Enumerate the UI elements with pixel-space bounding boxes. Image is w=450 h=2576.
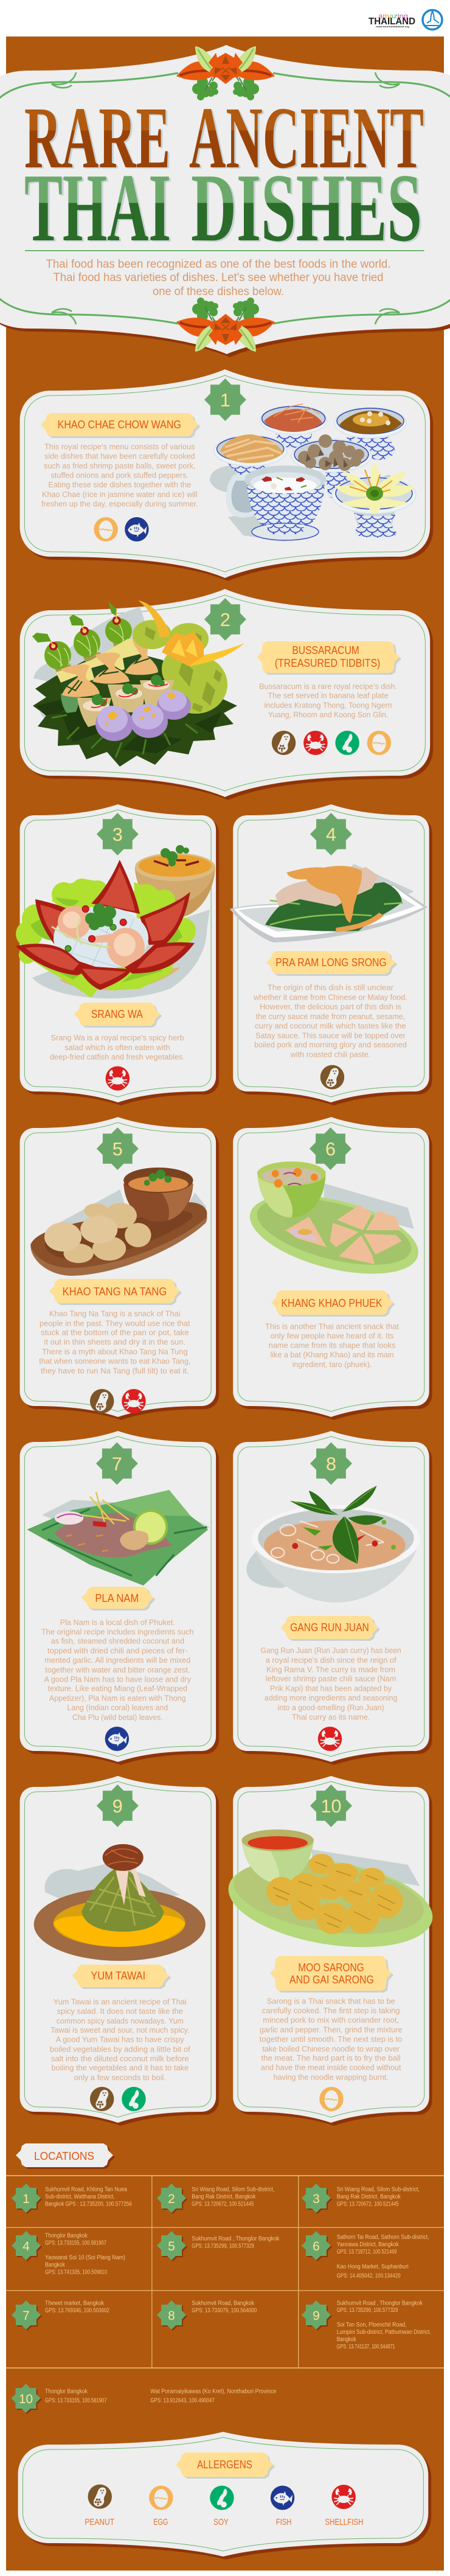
illustration: banana leaf plate with treasured tidbits — [32, 600, 244, 767]
location text 4: Bangkok — [45, 2262, 66, 2268]
description: leftover shrimp paste chili sauce (Nam — [266, 1674, 396, 1683]
description: freshen up the day, especially during summer. — [41, 500, 198, 509]
location text 4: GPS: 13.741335, 100.509810 — [45, 2269, 107, 2275]
intro text: Thai food has been recognized as one of the best foods in the world. — [46, 258, 390, 271]
location badge 4 — [12, 2231, 42, 2261]
location 1 — [12, 2184, 132, 2214]
description: Yum Tawai is an ancient recipe of Thai — [54, 1997, 187, 2007]
illustration: sarong balls with chili sauce — [222, 1829, 439, 1960]
title label — [72, 1965, 169, 1987]
description: The original recipe includes ingredients such — [41, 1627, 194, 1636]
location badge 6 — [302, 2231, 332, 2261]
location text 9: GPS: 13.741137, 100.544871 — [337, 2344, 395, 2350]
description: carefully cooked. The first step is taking — [262, 2007, 400, 2015]
location text 4: GPS: 13.733155, 100.581907 — [45, 2240, 106, 2246]
location text 9: GPS: 13.735299, 100.577329 — [337, 2307, 398, 2314]
title label: KHANG KHAO PHUEK — [281, 1297, 382, 1309]
location badge 3 — [302, 2184, 332, 2214]
illustration: Run Juan curry bowl with basil — [246, 1486, 420, 1603]
location 4 — [12, 2231, 125, 2275]
description: includes Kratong Thong, Toong Ngern — [264, 701, 392, 710]
title label — [270, 1956, 392, 1991]
allergen icon — [319, 2087, 344, 2111]
description: Appetizer), Pla Nam is eaten with Thong — [49, 1694, 186, 1703]
location badge 5 — [157, 2231, 187, 2261]
logo url: www.tourismthailand.org — [375, 25, 410, 28]
panel: dish 8 Gang Run Juan — [233, 1431, 429, 1762]
panel: dish 3 Srang Wa — [16, 804, 216, 1102]
description: Srang Wa is a royal recipe's spicy herb — [51, 1034, 184, 1042]
illustration: pork on morning glory with peanut sauce — [230, 864, 428, 942]
allergen icons — [272, 731, 391, 755]
description: The origin of this dish is still unclear — [268, 983, 393, 992]
description: stuffed onions and pork stuffed peppers. — [50, 471, 189, 480]
allergen: egg: EGG — [153, 2518, 168, 2527]
description: into a good-smelling (Run Juan) — [278, 1704, 384, 1712]
title line 1: RARE — [24, 89, 170, 187]
number badge: 2 — [220, 609, 230, 630]
description: take boiled Chinese noodle to wrap over — [262, 2045, 400, 2053]
location text 9 — [337, 2300, 431, 2350]
location badge 1: 1 — [22, 2192, 30, 2206]
description: This is another Thai ancient snack that — [265, 1322, 400, 1331]
panel: dish 7 Pla Nam — [20, 1431, 216, 1762]
illustration: pla nam on banana leaf — [27, 1490, 210, 1586]
number badge: 4 — [326, 824, 336, 845]
description: salt into the diluted coconut milk before — [51, 2055, 189, 2063]
allergen: egg — [149, 2486, 173, 2527]
location text 6: Kao Hong Market, Suphanburi — [337, 2263, 409, 2271]
description: they have to run Na Tang (full tilt) to eat it. — [41, 1366, 189, 1376]
location text 5: Sukhumvit Road , Thonglor Bangkok — [192, 2235, 280, 2243]
card inner line — [24, 810, 211, 1097]
allergen icon — [318, 1727, 342, 1751]
logo word: Thailand: THAILAND — [369, 16, 415, 27]
location text 1: Sukhumvit Road, Khlong Tan Nuea — [45, 2187, 127, 2193]
description: boiling the vegetables and it has to take — [51, 2064, 189, 2072]
title label: KHAO TANG NA TANG — [63, 1285, 167, 1298]
location badge 9: 9 — [313, 2309, 320, 2323]
description: the meat. The hard part is to fry the ball — [261, 2054, 401, 2063]
location text 1: Sub-district, Watthana District, — [45, 2194, 115, 2200]
title label: PRA RAM LONG SRONG — [275, 956, 387, 969]
number badge — [310, 813, 352, 855]
location text 2: Bang Rak District, Bangkok — [192, 2194, 256, 2200]
description: side dishes that have been carefully cooked — [44, 452, 195, 461]
location text 6: Yannawa District, Bangkok — [337, 2241, 400, 2248]
allergen: soy — [210, 2486, 234, 2527]
description: together until smooth. The next step is to — [260, 2035, 403, 2044]
bottom flower ornament — [176, 298, 275, 352]
title label: PLA NAM — [95, 1592, 139, 1604]
card inner line — [24, 595, 425, 791]
location badge 2 — [157, 2184, 187, 2214]
title label — [281, 1616, 378, 1639]
description: minced pork to mix with coriander root, — [263, 2016, 399, 2025]
location text 10: Thonglor Bangkok — [45, 2389, 88, 2395]
location text 10: Wat Poramaiyikawas (Ko Kret), Nonthaburi Province — [150, 2389, 277, 2395]
panel: allergens — [18, 2432, 428, 2557]
location text 8 — [192, 2300, 257, 2314]
location text 10: GPS: 13.733155, 100.581907 — [45, 2397, 107, 2404]
location badge 3: 3 — [313, 2192, 320, 2206]
description: Lang (Indian coral) leaves and — [67, 1704, 168, 1712]
card inner line — [238, 1781, 424, 2117]
description: Cha Plu (wild betal) leaves. — [72, 1713, 163, 1722]
description: ingredient, taro (phuek). — [292, 1360, 372, 1369]
location badge 10: 10 — [19, 2392, 33, 2406]
location text 3: Bang Rak District, Bangkok — [337, 2194, 401, 2200]
description: Khao Chae (rice in jasmine water and ice) will — [42, 490, 198, 499]
description: Khao Tang Na Tang is a snack of Thai — [49, 1309, 181, 1318]
location text 8: GPS: 13.733079, 100.564000 — [192, 2307, 257, 2314]
title label: (TREASURED TIDBITS) — [275, 656, 380, 669]
description: the curry sauce made from peanut, sesame, — [256, 1012, 405, 1021]
location badge 7: 7 — [22, 2309, 30, 2323]
description: The set served in banana leaf plate — [268, 691, 389, 700]
title label: KHAO CHAE CHOW WANG — [58, 418, 181, 431]
location text 7 — [45, 2300, 109, 2314]
location text 9: Soi Ton Son, Ploenchit Road, — [337, 2322, 407, 2328]
location badge 6: 6 — [313, 2240, 320, 2254]
description — [41, 1618, 194, 1722]
location badge 2: 2 — [168, 2192, 175, 2206]
description: mented garlic. All ingredients will be mixed — [44, 1656, 191, 1665]
description: that when someone wants to eat Khao Tang, — [39, 1357, 190, 1366]
number badge — [204, 378, 246, 421]
location text 9: Lumpini Sub-district, Pathumwan District, — [337, 2329, 431, 2336]
banner shape — [0, 45, 450, 354]
location 5 — [157, 2231, 280, 2261]
card inner line — [24, 1781, 211, 2117]
title label — [176, 2452, 273, 2477]
illustration: crispy rice crackers with dip — [30, 1168, 207, 1276]
title label: SRANG WA — [91, 1008, 143, 1020]
description: name came from its shape that looks — [269, 1341, 395, 1350]
allergen: peanut: PEANUT — [85, 2518, 114, 2527]
description: This royal recipe's menu consists of various — [44, 442, 195, 451]
title label — [41, 413, 198, 436]
allergen: fish — [271, 2486, 294, 2527]
description: Satay sauce. This sauce will be topped over — [255, 1031, 406, 1040]
description: boiled pork and morning glory and seasoned — [254, 1040, 407, 1050]
location badge 8 — [157, 2300, 187, 2331]
description: spicy salad. It does not taste like the — [57, 2007, 183, 2016]
location 7 — [12, 2300, 109, 2331]
number badge: 7 — [112, 1453, 122, 1475]
description: A good Yum Tawai has to have crispy — [56, 2035, 185, 2044]
panel: dish 5 Khao Tang Na Tang — [20, 1117, 216, 1417]
illustration: royal side dishes in porcelain bowls — [210, 404, 416, 541]
allergen icon — [106, 1066, 130, 1090]
number badge — [204, 598, 246, 641]
location text 3: Sri Wiang Road, Silom Sub-district, — [337, 2187, 420, 2193]
location text 1: Bangkok GPS : 13.735200, 100.577256 — [45, 2201, 132, 2207]
title label — [49, 1279, 180, 1303]
location text 4 — [45, 2233, 125, 2275]
description: texture. Like eating Miang (Leaf-Wrapped — [48, 1684, 187, 1693]
heading: locations: LOCATIONS — [34, 2150, 94, 2162]
description — [260, 1997, 403, 2082]
location text 9: Sukhumvit Road , Thonglor Bangkok — [337, 2300, 423, 2307]
card shape — [20, 369, 430, 578]
description: King Rama V. The curry is made from — [266, 1665, 395, 1674]
title line 1 — [24, 89, 424, 187]
location text 9: Bangkok — [337, 2336, 357, 2343]
description: only few people have heard of it. Its — [270, 1332, 394, 1340]
title label — [266, 951, 395, 974]
description — [50, 1034, 185, 1062]
description: Bussaracum is a rare royal recipe's dish. — [259, 682, 397, 691]
allergen: fish: FISH — [276, 2518, 291, 2527]
description: with roasted chili paste. — [290, 1050, 370, 1059]
locations grid lines — [6, 2175, 444, 2369]
title line 2 — [24, 153, 422, 262]
description: common spicy salads nowadays. Yum — [57, 2017, 184, 2025]
location 3 — [302, 2184, 420, 2214]
description — [41, 442, 198, 509]
title label — [81, 1587, 154, 1609]
location text 5 — [192, 2235, 280, 2250]
location badge 8: 8 — [168, 2309, 175, 2323]
location text 3 — [337, 2187, 420, 2207]
allergen icons — [94, 517, 149, 541]
number badge — [97, 1784, 139, 1827]
description: There is a myth about Khao Tang Na Tung — [42, 1348, 188, 1356]
card shape — [233, 1776, 429, 2123]
description: as fish, steamed shredded coconut and — [51, 1637, 184, 1646]
number badge — [96, 1442, 138, 1485]
description: A good Pla Nam has to have loose and dry — [44, 1675, 192, 1684]
description: it out in thin sheets and dry it in the sun. — [44, 1338, 185, 1346]
description: Sarong is a Thai snack that has to be — [267, 1997, 395, 2006]
location text 2: Sri Wiang Road, Silom Sub-district, — [192, 2187, 274, 2193]
card inner line — [238, 1436, 424, 1756]
description: Gang Run Juan (Run Juan curry) has been — [261, 1646, 401, 1655]
card inner line — [238, 810, 424, 1097]
description — [50, 1997, 190, 2082]
vines — [0, 72, 450, 324]
description — [253, 983, 407, 1059]
panel: dish 1 Khao Chae Chow Wang — [20, 369, 430, 578]
number badge: 3 — [112, 824, 123, 845]
number badge — [310, 1127, 351, 1170]
number badge — [310, 1784, 352, 1827]
description: such as fried shrimp paste balls, sweet pork, — [44, 462, 196, 470]
location text 7: Thewet market, Bangkok — [45, 2300, 105, 2307]
location text 4: Yaowarat Soi 10 (Soi Plang Nam) — [45, 2255, 125, 2261]
card shape — [233, 804, 429, 1102]
description: only a few seconds to boil. — [74, 2073, 166, 2082]
card inner line — [238, 1123, 424, 1412]
intro text — [46, 258, 390, 298]
card shape — [20, 1117, 216, 1417]
title line 2: THAI — [24, 153, 171, 262]
description — [265, 1322, 400, 1369]
location text 2 — [192, 2187, 274, 2207]
number badge — [310, 1442, 352, 1485]
description: Thai curry as its name. — [292, 1713, 370, 1721]
description: boiled vegetables by adding a little bit of — [50, 2045, 190, 2054]
card shape — [20, 1776, 216, 2123]
panel: dish 2 Bussaracum — [20, 589, 430, 797]
title label — [257, 641, 400, 673]
logo: round tourism seal — [423, 10, 442, 29]
title label: ALLERGENS — [197, 2458, 252, 2471]
location 9 — [302, 2300, 431, 2350]
location text 7: GPS: 13.769346, 100.503602 — [45, 2307, 109, 2314]
card inner line — [24, 1436, 211, 1756]
description: people in the past. They would use rice that — [40, 1319, 190, 1328]
location text 5: GPS: 13.735299, 100.577329 — [192, 2243, 254, 2250]
location text 2: GPS: 13.720672, 100.521445 — [192, 2201, 254, 2207]
allergen: soy: SOY — [213, 2518, 229, 2527]
description — [39, 1309, 190, 1376]
card shape — [233, 1431, 429, 1762]
description: Yuang, Rhoom and Koong Son Glin. — [268, 711, 388, 719]
location badge 5: 5 — [168, 2240, 175, 2254]
allergen icons — [90, 1389, 146, 1413]
location badge 7 — [12, 2300, 42, 2331]
allergen icons — [90, 2087, 146, 2111]
location text 6: GPS: 14.405042, 100.134420 — [337, 2273, 401, 2279]
allergen: shellfish — [325, 2485, 364, 2527]
location text 8: Sukhumvit Road, Bangkok — [192, 2300, 255, 2307]
intro text: Thai food has varieties of dishes. Let's see whether you have tried — [54, 271, 383, 284]
illustration: Yum Tawai salad on coconut sauce — [34, 1844, 206, 1961]
number badge: 9 — [112, 1795, 123, 1817]
location text 10: GPS: 13.912643, 100.490047 — [150, 2397, 215, 2404]
description: whether it came from Chinese or Malay food. — [253, 993, 407, 1002]
location 8 — [157, 2300, 257, 2331]
logo: Amazing Thailand — [369, 13, 415, 28]
number badge: 6 — [325, 1138, 336, 1160]
description: However, the delicious part of this dish is — [260, 1003, 401, 1011]
top flower ornament — [176, 46, 275, 100]
number badge: 8 — [326, 1453, 336, 1475]
description — [261, 1646, 401, 1721]
panel: dish 10 Moo Sarong and Gai Sarong — [222, 1776, 439, 2123]
panel: dish 4 Pra Ram Long Srong — [230, 804, 429, 1102]
description: adding more ingredients and seasoning — [265, 1694, 398, 1702]
panel: title banner — [0, 45, 450, 354]
location badge 4: 4 — [22, 2240, 30, 2254]
location badge 10 — [11, 2384, 42, 2414]
card shape — [20, 804, 216, 1102]
illustration: srang wa in banana flower — [16, 845, 215, 998]
location badge 1 — [12, 2184, 42, 2214]
title label: GANG RUN JUAN — [290, 1621, 369, 1634]
description — [259, 682, 397, 719]
card shape — [233, 1117, 429, 1417]
allergen icon — [105, 1727, 129, 1751]
description: curry and coconut milk which tastes like the — [255, 1022, 406, 1031]
number badge — [97, 1127, 139, 1170]
location badge 9 — [302, 2300, 332, 2331]
title label: BUSSARACUM — [292, 644, 359, 656]
card inner line — [22, 2437, 423, 2551]
card inner line — [24, 1123, 211, 1412]
number badge — [97, 813, 139, 855]
card shape — [20, 1431, 216, 1762]
location text 6: Sathorn Tai Road, Sathorn Sub-district, — [337, 2234, 429, 2241]
description: having the noodle wrapping burnt. — [273, 2073, 389, 2082]
card shape — [20, 589, 430, 797]
description: Tawai is sweet and sour, not much spicy. — [50, 2026, 189, 2035]
illustration: taro bat-shaped snack on green plate — [242, 1161, 426, 1289]
card shape — [18, 2432, 428, 2557]
description: deep-fried catfish and fresh vegetables. — [50, 1053, 185, 1062]
location 2 — [157, 2184, 274, 2214]
location text 1 — [45, 2187, 132, 2207]
title label: MOO SARONG — [298, 1961, 364, 1974]
number badge: 10 — [320, 1795, 341, 1817]
description: a royal recipe's dish since the reign of — [266, 1656, 396, 1665]
location 10 — [11, 2384, 277, 2414]
logo word: amazing: amazing — [378, 13, 408, 20]
description: Eating these side dishes together with the — [48, 481, 191, 489]
location text 3: GPS: 13.720672, 100.521445 — [337, 2201, 399, 2207]
allergen: peanut — [85, 2485, 114, 2527]
number badge: 1 — [220, 389, 230, 411]
allergen icon — [320, 1065, 344, 1089]
description: Prik Kapi) that has been adapted by — [270, 1684, 392, 1693]
title label — [271, 1290, 393, 1315]
description: topped with dried chili and pieces of fer- — [47, 1646, 188, 1655]
card inner line — [24, 375, 425, 572]
title divider — [25, 250, 424, 251]
title label: YUM TAWAI — [91, 1969, 145, 1982]
number badge: 5 — [112, 1138, 123, 1160]
heading: locations — [16, 2143, 113, 2167]
allergen: shellfish: SHELLFISH — [325, 2518, 364, 2527]
intro text: one of these dishes below. — [153, 285, 284, 298]
panel: dish 6 Khang Khao Phuek — [233, 1117, 429, 1417]
description: garlic and pepper. Then, grind the mixture — [260, 2025, 403, 2035]
description: stuck at the bottom of the pan or pot, take — [41, 1328, 189, 1337]
location 6 — [302, 2231, 429, 2279]
location text 10 — [45, 2389, 277, 2404]
title label — [74, 1003, 160, 1026]
description: like a bat (Khang Khao) and its main — [270, 1351, 394, 1359]
description: together with water and bitter orange zest. — [45, 1666, 190, 1674]
title label: AND GAI SARONG — [289, 1973, 374, 1986]
panel: dish 9 Yum Tawai — [20, 1776, 216, 2123]
location text 4: Thonglor Bangkok — [45, 2233, 88, 2239]
location text 6 — [337, 2234, 429, 2279]
description: and have the meat inside cooked without — [261, 2063, 401, 2072]
location text 6: GPS: 13.718712, 100.521469 — [337, 2249, 397, 2255]
description: salad which is often eaten with — [64, 1043, 170, 1052]
description: Pla Nam is a local dish of Phuket. — [60, 1618, 175, 1627]
